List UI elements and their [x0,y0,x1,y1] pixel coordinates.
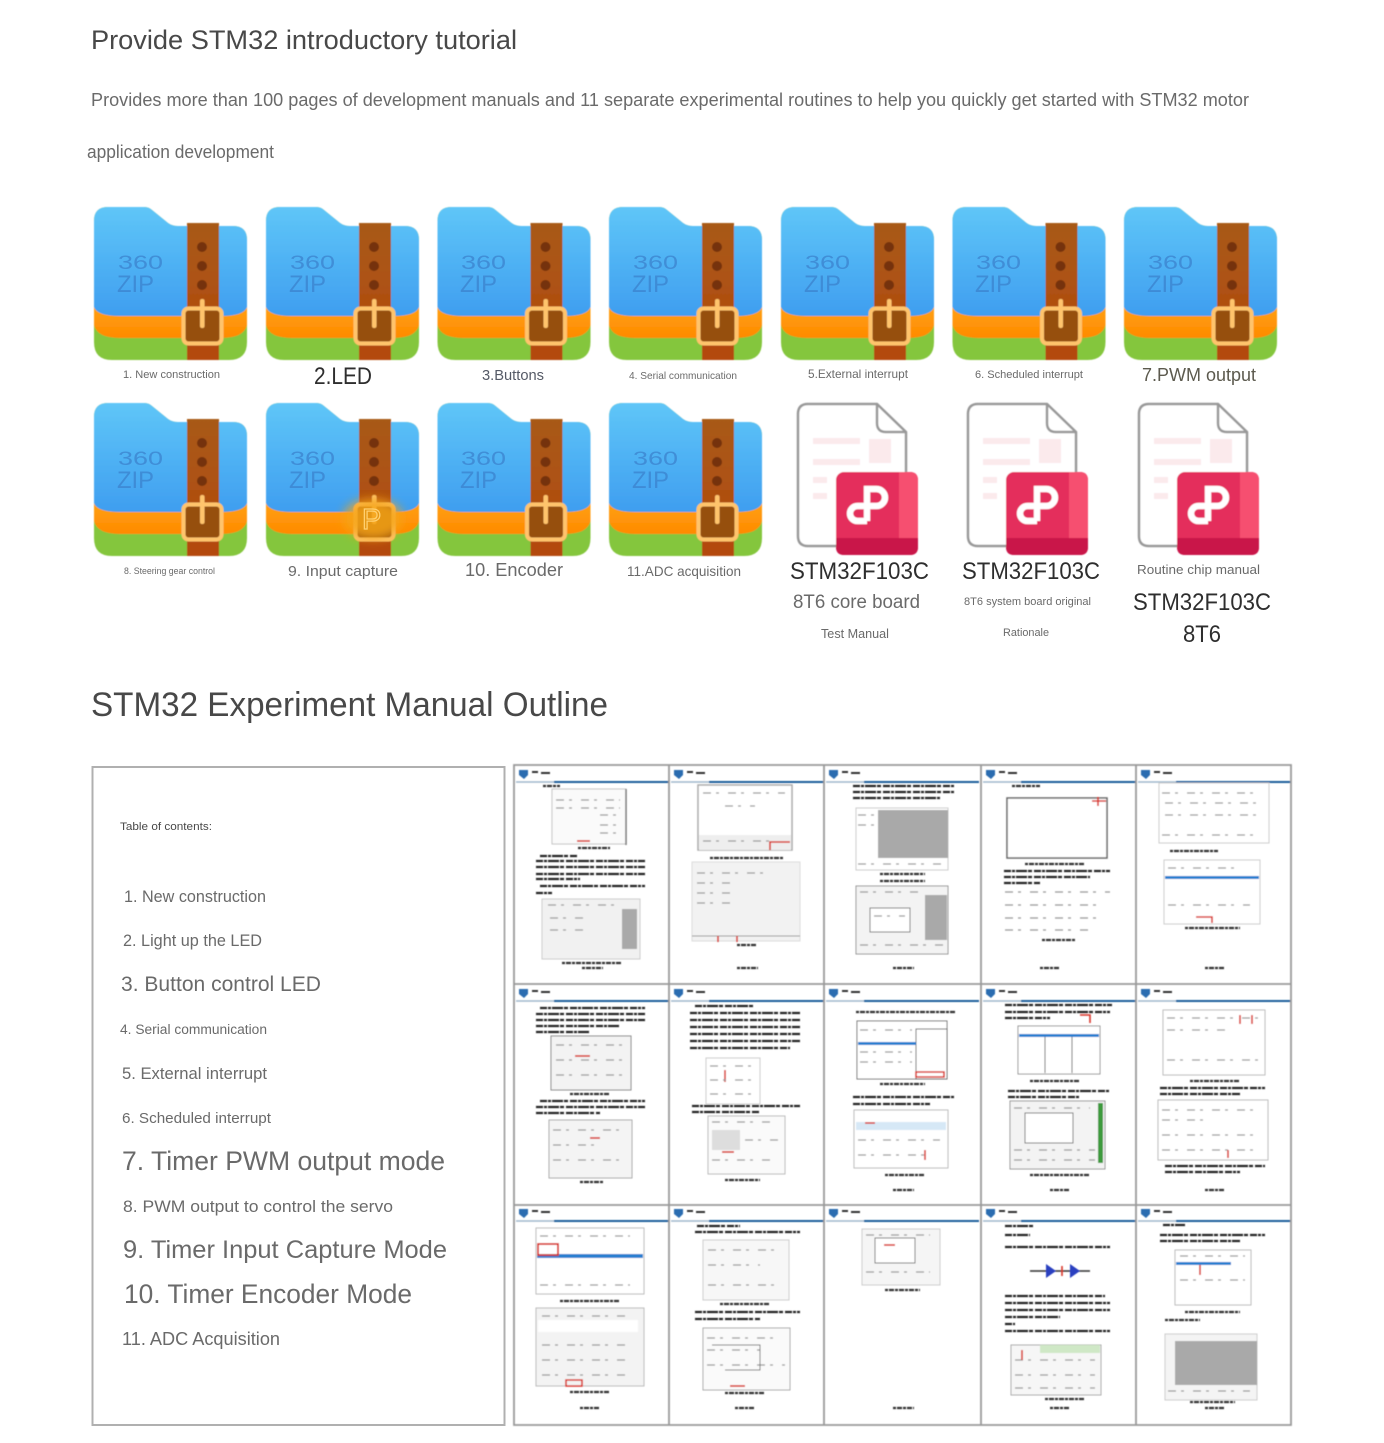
list: contents entries: 3. Button control LED [121,973,321,996]
icon: PDF system board rationale [962,404,1100,639]
icon: PDF system board rationale: Rationale [1003,627,1049,639]
list: contents entries: 2. Light up the LED [123,932,262,950]
list: contents entries: 7. Timer PWM output mode [122,1146,445,1176]
icon: archive 4. Serial communication: 360 [633,253,678,274]
icon: archive 2.LED: 2.LED [314,363,372,390]
icon: archive 10. Encoder: ZIP [460,467,497,494]
list: contents entries: 1. New construction [124,888,266,906]
icon: archive 5.External interrupt: 5.External interrupt [808,367,909,381]
icon: archive 8. Steering gear control: ZIP [117,467,154,494]
icon: archive 9. Input capture: 360 [290,449,335,470]
icon: archive 4. Serial communication: 4. Serial communication [629,370,737,382]
icon: archive 2.LED [266,207,419,390]
list: contents entries [120,888,447,1349]
text block: tutorial description: Provides more than 100 pages of development manuals and 11 separate experimental routines to help you quickly get started with STM32 motor [91,90,1249,110]
text: contents label: Table of contents: [120,821,212,833]
icon: PDF core board test manual: 8T6 core board [793,592,920,613]
icon: archive 11.ADC acquisition [609,403,762,579]
icon: archive 8. Steering gear control: 8. Steering gear control [124,566,215,576]
icon: PDF core board test manual [790,404,929,641]
icon: archive 2.LED: ZIP [289,271,326,298]
icon: PDF routine chip manual: 8T6 [1183,621,1221,648]
icon: archive 1. New construction [94,207,247,381]
icon: archive 7.PWM output [1124,207,1277,385]
icon: archive 1. New construction: ZIP [117,271,154,298]
icon: PDF routine chip manual: Routine chip manual [1137,562,1260,577]
text block: tutorial description: application development [87,142,274,162]
thumbnail pages row 2 [536,1005,1268,1190]
panel: resource file grid [94,207,1277,648]
icon: archive 5.External interrupt: ZIP [804,271,841,298]
icon: archive 3.Buttons: 3.Buttons [482,368,544,384]
list: contents entries: 6. Scheduled interrupt [122,1110,272,1127]
icon: archive 8. Steering gear control [94,403,247,576]
icon: archive 9. Input capture [266,403,419,580]
icon: archive 7.PWM output: 7.PWM output [1142,365,1256,385]
panel: table of contents [92,767,504,1425]
icon: PDF routine chip manual: STM32F103C [1133,589,1271,616]
list: contents entries: 9. Timer Input Capture Mode [123,1236,447,1264]
icon: archive 5.External interrupt [781,207,934,381]
list: contents entries: 10. Timer Encoder Mode [124,1279,412,1309]
panel: manual page thumbnails [514,765,1291,1425]
list: contents entries: 4. Serial communication [120,1022,267,1037]
list: contents entries: 5. External interrupt [122,1065,267,1083]
icon: archive 3.Buttons: 360 [461,253,506,274]
text block: tutorial description [87,90,1249,162]
icon: archive 11.ADC acquisition: 360 [633,449,678,470]
icon: PDF system board rationale: 8T6 system board original [964,596,1091,608]
thumbnail grid frame [514,765,1291,1425]
icon: archive 5.External interrupt: 360 [805,253,850,274]
icon: archive 6. Scheduled interrupt: 360 [976,253,1021,274]
thumbnail pages row 3 [536,1225,1265,1408]
icon: archive 9. Input capture: ZIP [289,467,326,494]
icon: archive 10. Encoder [438,403,590,580]
icon: archive 6. Scheduled interrupt: 6. Scheduled interrupt [975,369,1083,381]
icon: archive 6. Scheduled interrupt [952,207,1106,381]
icon: archive 9. Input capture: 9. Input capture [288,563,398,580]
icon: archive 1. New construction: 1. New construction [123,369,220,381]
list: contents entries: 11. ADC Acquisition [122,1328,280,1349]
icon: archive 3.Buttons [438,207,590,384]
icon: archive 7.PWM output: 360 [1148,253,1193,274]
icon: archive 11.ADC acquisition: 11.ADC acquisition [627,563,741,579]
icon: PDF routine chip manual [1133,404,1271,648]
icon: archive 10. Encoder: 360 [461,449,506,470]
icon: PDF core board test manual: Test Manual [821,627,889,641]
icon: PDF system board rationale: STM32F103C [962,558,1100,585]
icon: archive 3.Buttons: ZIP [460,271,497,298]
icon: archive 1. New construction: 360 [118,253,163,274]
icon: archive 4. Serial communication: ZIP [632,271,669,298]
icon: archive 2.LED: 360 [290,253,335,274]
icon: archive 9. Input capture: P [362,504,381,536]
icon: archive 6. Scheduled interrupt: ZIP [975,271,1012,298]
title: introductory tutorial: Provide STM32 introductory tutorial [91,25,517,55]
icon: archive 8. Steering gear control: 360 [118,449,163,470]
icon: archive 4. Serial communication [609,207,762,382]
icon: archive 7.PWM output: ZIP [1147,271,1184,298]
icon: archive 11.ADC acquisition: ZIP [632,467,669,494]
icon: archive 10. Encoder: 10. Encoder [465,559,563,580]
thumbnail pages row 1 [536,783,1269,968]
icon: PDF core board test manual: STM32F103C [790,558,929,585]
heading: experiment manual outline: STM32 Experiment Manual Outline [91,686,608,724]
list: contents entries: 8. PWM output to control the servo [123,1198,393,1216]
